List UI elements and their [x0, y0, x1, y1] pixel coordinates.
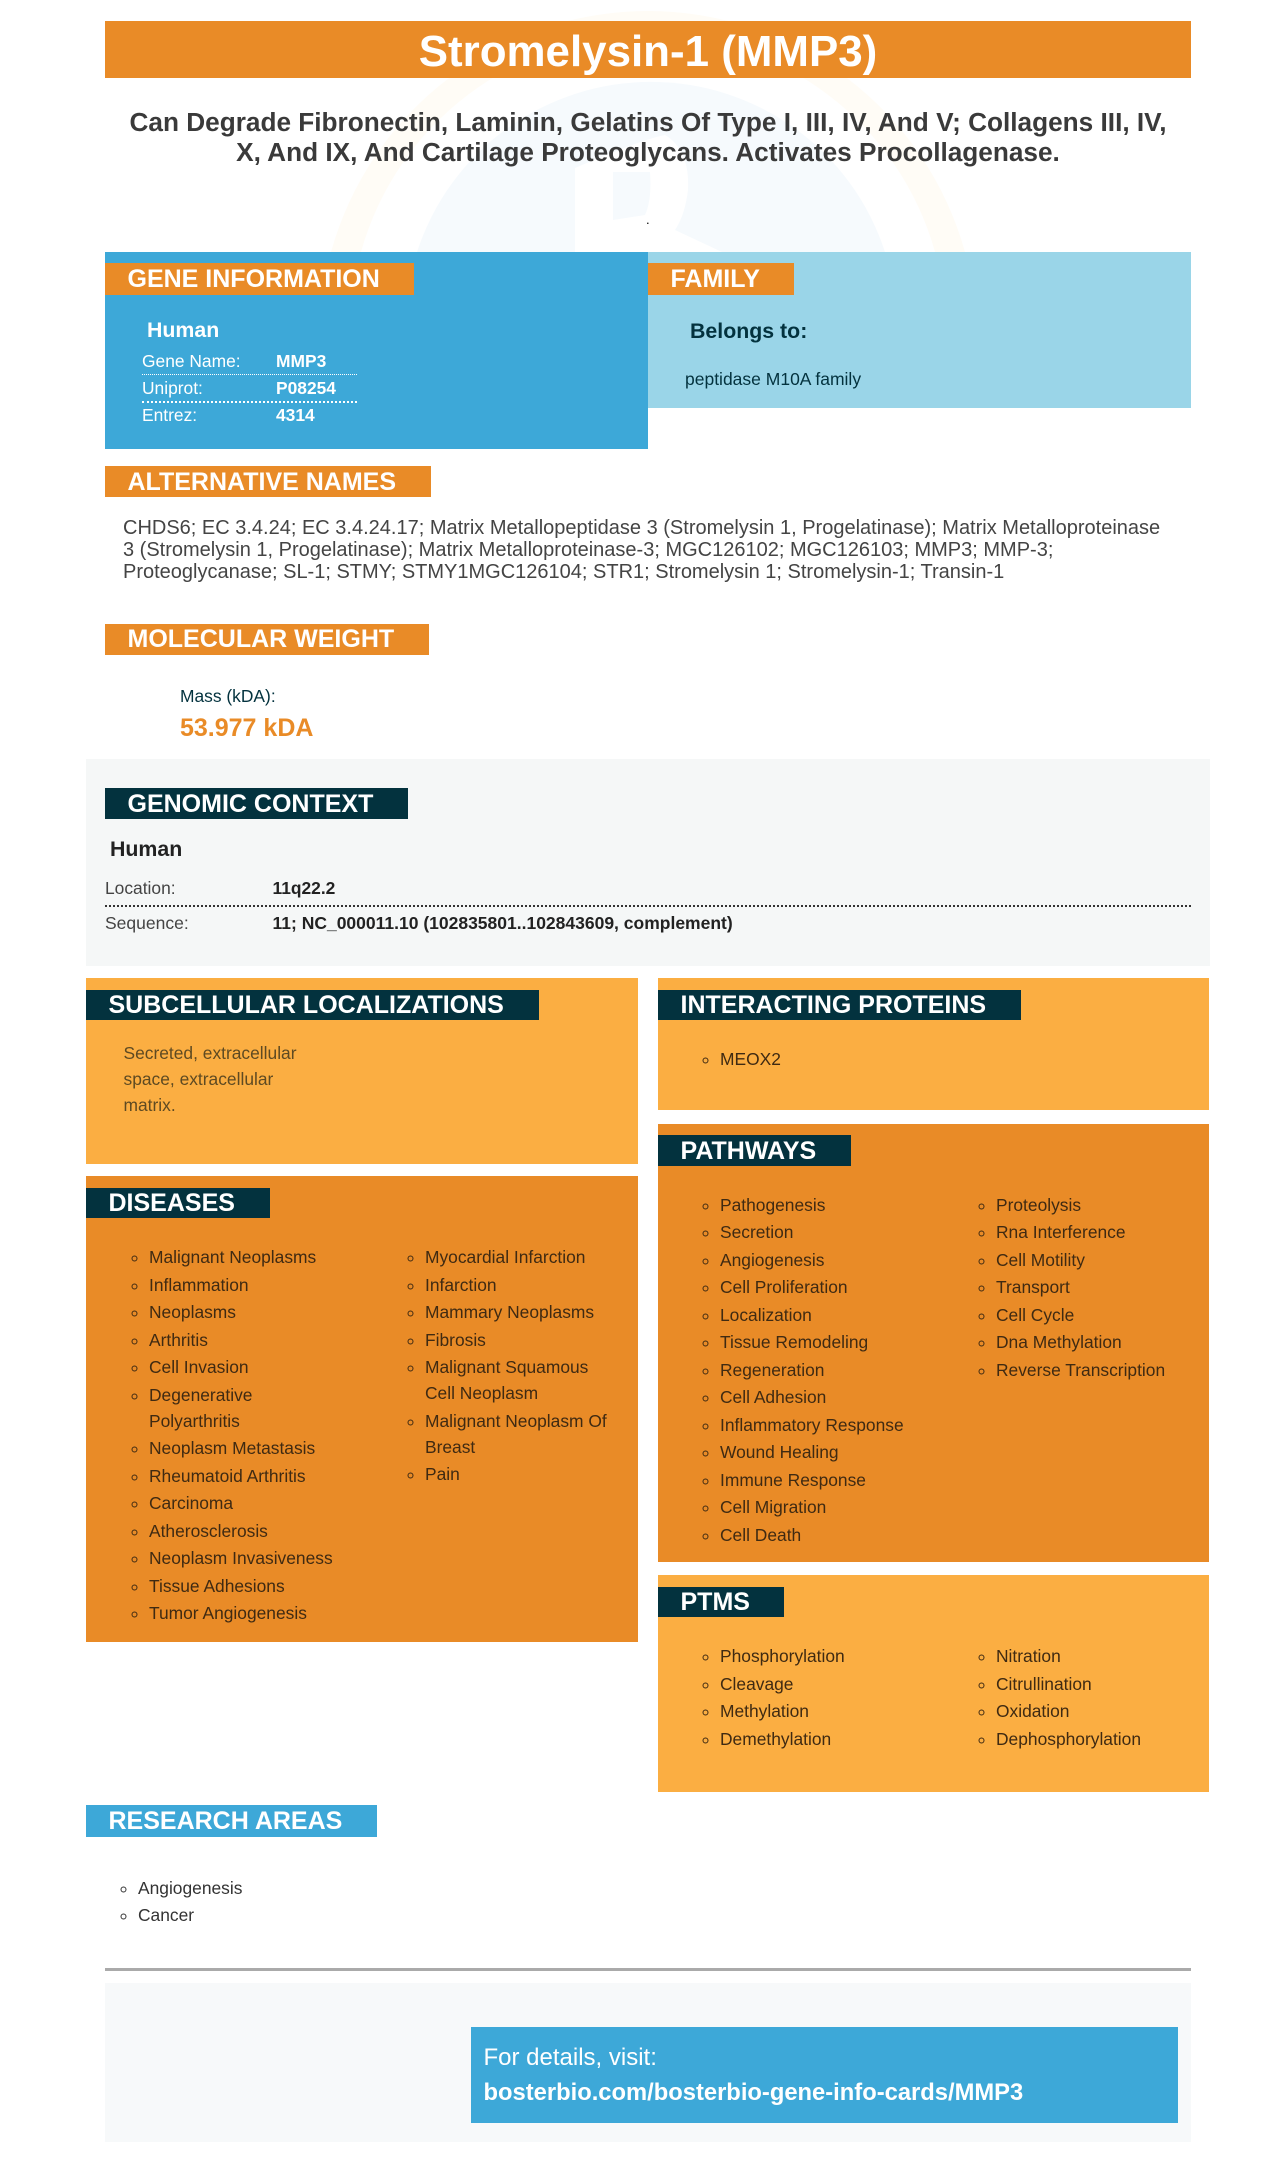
heading: pathways: PATHWAYS — [680, 1137, 816, 1165]
alternative names text: CHDS6; EC 3.4.24; EC 3.4.24.17; Matrix Metallopeptidase 3 (Stromelysin 1, Progelatinase); Matrix Metalloproteinase — [123, 517, 1160, 539]
pathways list column 2: Rna Interference — [996, 1222, 1126, 1242]
title banner: Stromelysin-1 (MMP3) — [419, 27, 877, 76]
diseases list column 1: Cell Invasion — [149, 1357, 249, 1377]
heading: family — [648, 262, 794, 294]
pathways list column 1: Wound Healing — [720, 1442, 839, 1462]
research areas list: Angiogenesis — [138, 1878, 242, 1898]
PTMs list column 1 — [702, 1646, 845, 1748]
pathways list column 1: Pathogenesis — [720, 1194, 825, 1214]
PTMs list column 2: Nitration — [996, 1646, 1061, 1666]
pathways list column 1: Regeneration — [720, 1360, 824, 1380]
diseases list column 1: Atherosclerosis — [149, 1520, 268, 1540]
diseases list column 1 — [132, 1247, 333, 1623]
small dot: . — [646, 212, 650, 227]
subtitle description — [129, 107, 1167, 166]
heading: PTMs — [658, 1587, 784, 1617]
pathways list column 2: Transport — [996, 1277, 1070, 1297]
pathways list column 1: Cell Proliferation — [720, 1277, 848, 1297]
alternative names text — [123, 517, 1160, 583]
pathways list column 1: Cell Adhesion — [720, 1387, 826, 1407]
panel: interacting proteins — [658, 978, 1209, 1110]
PTMs list column 1: Phosphorylation — [720, 1646, 845, 1666]
interacting proteins list: MEOX2 — [720, 1049, 781, 1069]
pathways list column 1: Immune Response — [720, 1470, 866, 1490]
PTMs list column 2 — [978, 1646, 1141, 1748]
gene facts table: Uniprot: — [142, 378, 203, 398]
heading: genomic context: GENOMIC CONTEXT — [128, 790, 373, 818]
family value: peptidase M10A family — [685, 369, 861, 389]
pathways list column 1: Tissue Remodeling — [720, 1332, 868, 1352]
subtitle description: X, And IX, And Cartilage Proteoglycans. Activates Procollagenase. — [236, 136, 1060, 166]
gene facts table: Entrez: — [142, 405, 197, 425]
call to action box — [471, 2027, 1178, 2123]
diseases list column 2: Fibrosis — [425, 1330, 486, 1350]
heading: subcellular localizations: SUBCELLULAR LOCALIZATIONS — [108, 991, 504, 1019]
diseases list column 1: Neoplasm Metastasis — [149, 1438, 315, 1458]
panel: genomic context — [86, 759, 1210, 966]
heading: molecular weight: MOLECULAR WEIGHT — [128, 625, 394, 653]
diseases list column 2: Malignant Squamous — [425, 1357, 588, 1377]
heading: pathways — [658, 1135, 851, 1166]
gene facts table — [142, 351, 357, 425]
heading: interacting proteins: INTERACTING PROTEINS — [680, 991, 986, 1019]
gene facts table: P08254 — [276, 378, 336, 398]
panel: pathways — [658, 1124, 1209, 1562]
PTMs list column 2: Dephosphorylation — [996, 1728, 1141, 1748]
heading: PTMs: PTMS — [680, 1588, 750, 1616]
heading: research areas: RESEARCH AREAS — [108, 1807, 342, 1835]
localization text: matrix. — [124, 1095, 176, 1115]
pathways list column 1: Cell Death — [720, 1524, 801, 1544]
diseases list column 1: Carcinoma — [149, 1493, 233, 1513]
diseases list column 1: Rheumatoid Arthritis — [149, 1466, 306, 1486]
diseases list column 1: Polyarthritis — [149, 1410, 240, 1430]
diseases list column 1: Neoplasm Invasiveness — [149, 1548, 333, 1568]
pathways list column 2: Dna Methylation — [996, 1332, 1122, 1352]
pathways list column 1: Secretion — [720, 1222, 793, 1242]
location row: Location: — [105, 878, 176, 898]
watermark logo — [332, 11, 964, 252]
pathways list column 2: Cell Cycle — [996, 1304, 1074, 1324]
location row: 11q22.2 — [272, 878, 335, 898]
research areas list: Cancer — [138, 1905, 194, 1925]
localization text — [124, 1043, 297, 1115]
PTMs list column 2: Citrullination — [996, 1674, 1092, 1694]
panel: PTMs — [658, 1575, 1209, 1792]
diseases list column 2: Malignant Neoplasm Of — [425, 1410, 607, 1430]
diseases list column 1: Arthritis — [149, 1330, 208, 1350]
diseases list column 2: Myocardial Infarction — [425, 1247, 585, 1267]
diseases list column 1: Inflammation — [149, 1274, 249, 1294]
heading: gene information: GENE INFORMATION — [128, 264, 380, 292]
gene facts table: MMP3 — [276, 351, 326, 371]
gene facts table: Gene Name: — [142, 351, 241, 371]
pathways list column 1 — [702, 1194, 904, 1544]
pathways list column 2 — [978, 1194, 1165, 1380]
mass value: 53.977 kDA — [180, 714, 313, 742]
diseases list column 2: Pain — [425, 1464, 460, 1484]
diseases list column 2: Infarction — [425, 1274, 497, 1294]
diseases list column 1: Tissue Adhesions — [149, 1576, 285, 1596]
species label: Human — [110, 837, 182, 861]
diseases list column 1: Tumor Angiogenesis — [149, 1603, 307, 1623]
pathways list column 1: Cell Migration — [720, 1497, 826, 1517]
diseases list column 2: Cell Neoplasm — [425, 1383, 538, 1403]
title banner — [105, 21, 1191, 78]
pathways list column 1: Angiogenesis — [720, 1250, 824, 1270]
localization text: Secreted, extracellular — [124, 1043, 297, 1063]
pathways list column 2: Cell Motility — [996, 1250, 1085, 1270]
belongs to label: Belongs to: — [690, 318, 807, 342]
pathways list column 1: Localization — [720, 1304, 812, 1324]
pathways list column 2: Reverse Transcription — [996, 1360, 1165, 1380]
diseases list column 1: Degenerative — [149, 1384, 252, 1404]
heading: diseases: DISEASES — [108, 1189, 235, 1217]
research areas list — [120, 1878, 242, 1925]
location row — [105, 878, 335, 898]
subtitle description: Can Degrade Fibronectin, Laminin, Gelatins Of Type I, III, IV, And V; Collagens III, IV, — [129, 107, 1167, 137]
panel: subcellular localizations — [86, 978, 638, 1164]
diseases list column 2 — [408, 1247, 607, 1484]
heading: family: FAMILY — [670, 264, 760, 292]
panel: gene information — [105, 252, 648, 449]
pathways list column 2: Proteolysis — [996, 1194, 1081, 1214]
species label: Human — [147, 318, 219, 342]
PTMs list column 1: Methylation — [720, 1701, 809, 1721]
sequence row: 11; NC_000011.10 (102835801..102843609, complement) — [272, 913, 733, 933]
details label: For details, visit: — [484, 2044, 657, 2071]
diseases list column 2: Mammary Neoplasms — [425, 1302, 594, 1322]
diseases list column 2: Breast — [425, 1436, 475, 1456]
heading: diseases — [86, 1188, 270, 1218]
panel: diseases — [86, 1176, 638, 1642]
alternative names text: Proteoglycanase; SL-1; STMY; STMY1MGC126104; STR1; Stromelysin 1; Stromelysin-1; Transin-1 — [123, 561, 1004, 583]
sequence row: Sequence: — [105, 913, 189, 933]
localization text: space, extracellular — [124, 1069, 273, 1089]
footer panel — [105, 1983, 1191, 2142]
details url: bosterbio.com/bosterbio-gene-info-cards/MMP3 — [484, 2079, 1023, 2106]
PTMs list column 1: Demethylation — [720, 1728, 831, 1748]
pathways list column 1: Inflammatory Response — [720, 1414, 904, 1434]
diseases list column 1: Neoplasms — [149, 1302, 236, 1322]
PTMs list column 1: Cleavage — [720, 1674, 793, 1694]
heading: alternative names: ALTERNATIVE NAMES — [128, 468, 396, 496]
alternative names text: 3 (Stromelysin 1, Progelatinase); Matrix Metalloproteinase-3; MGC126102; MGC126103; MMP3; MMP-3; — [123, 539, 1053, 561]
panel: family — [648, 252, 1191, 408]
PTMs list column 2: Oxidation — [996, 1701, 1069, 1721]
diseases list column 1: Malignant Neoplasms — [149, 1247, 316, 1267]
mass label: Mass (kDA): — [180, 686, 276, 706]
gene facts table: 4314 — [276, 405, 315, 425]
